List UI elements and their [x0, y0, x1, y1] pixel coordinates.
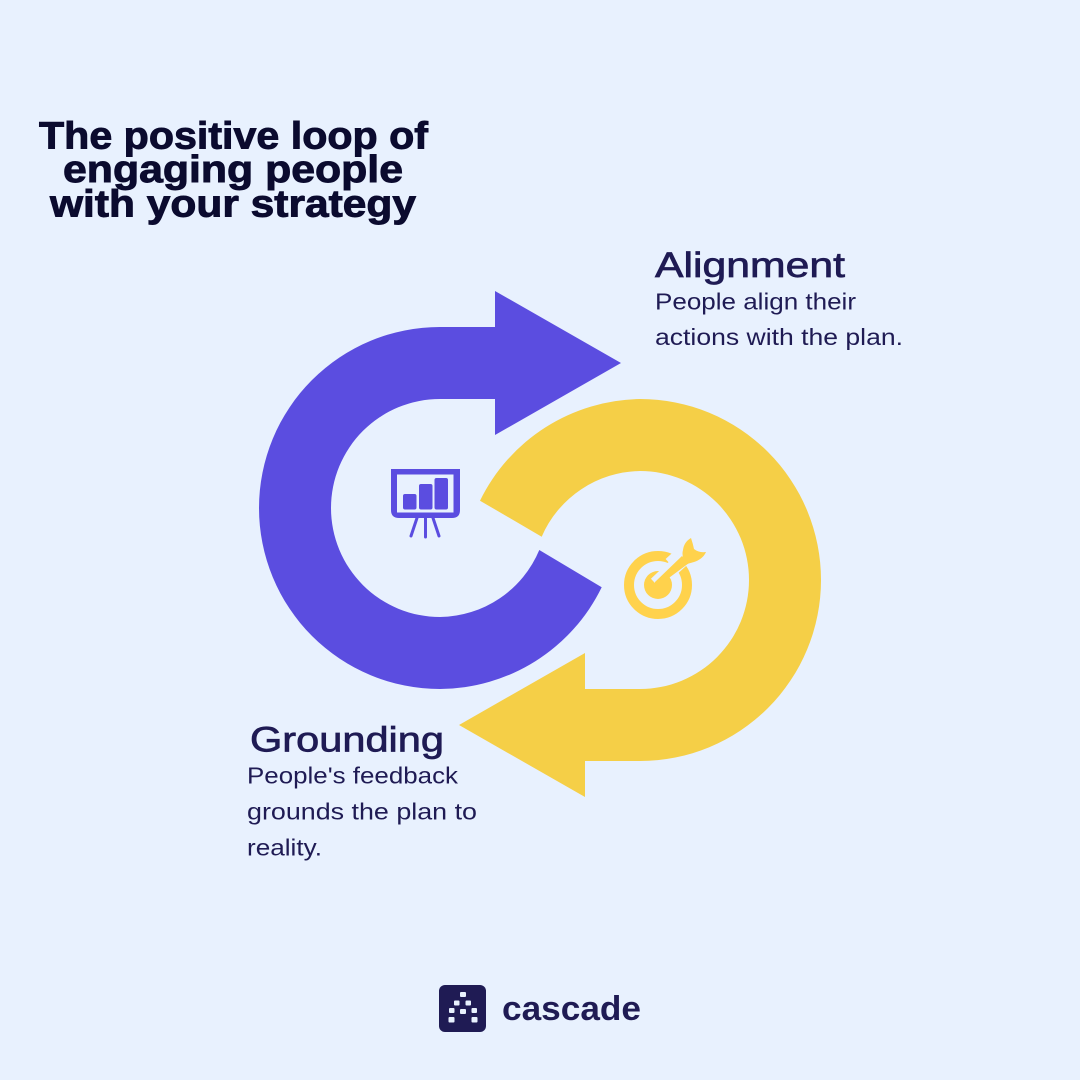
arrow: yellow loop [459, 399, 821, 797]
heading: grounding: Grounding [250, 720, 444, 760]
description: alignment [655, 288, 903, 350]
icon: cascade logo mark [439, 985, 486, 1032]
arrow: purple loop [259, 291, 621, 689]
description: alignment: People align their [655, 288, 856, 314]
text block: grounding [247, 720, 477, 860]
logo: cascade [439, 985, 641, 1032]
icon: presentation board with bar chart [391, 469, 460, 537]
description: grounding: reality. [247, 834, 322, 860]
title: engaging people [63, 149, 403, 191]
icon: target with dart [629, 538, 706, 614]
title [39, 116, 428, 226]
description: grounding [247, 762, 477, 860]
title: The positive loop of [39, 116, 428, 158]
title: with your strategy [49, 184, 416, 226]
text block: alignment [655, 246, 903, 350]
description: alignment: actions with the plan. [655, 324, 903, 350]
wordmark: cascade [502, 990, 641, 1028]
description: grounding: grounds the plan to [247, 798, 477, 824]
heading: alignment: Alignment [655, 246, 845, 285]
description: grounding: People's feedback [247, 762, 459, 788]
